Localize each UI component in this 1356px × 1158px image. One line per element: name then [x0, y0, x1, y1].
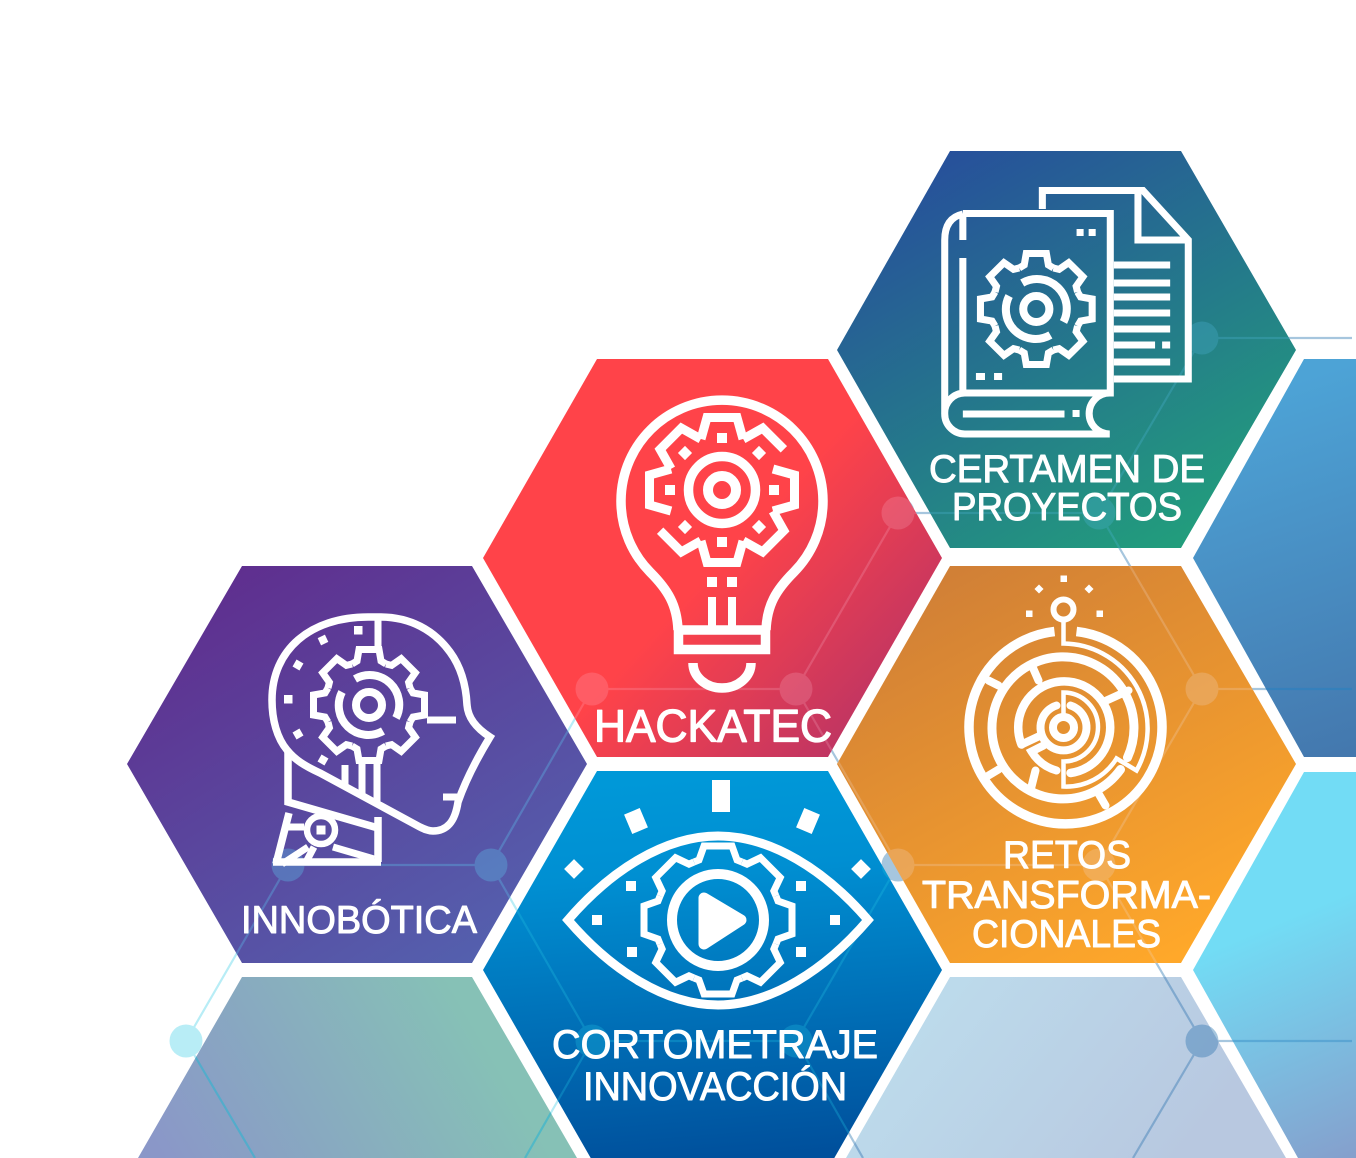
panel: hexagon shapes: [127, 151, 1356, 1158]
icon: eye with gear and play button: [564, 780, 871, 1005]
hexagon infographic: [127, 151, 1356, 1158]
panel: cortometraje innovaccion: [552, 780, 878, 1109]
icon: robot head with gear: [272, 617, 490, 864]
heading: retos transformacionales: CIONALES: [972, 913, 1161, 956]
icon: circular maze: [969, 576, 1162, 824]
heading: innobotica: INNOBÓTICA: [241, 899, 477, 942]
panel: certamen de proyectos: [929, 190, 1205, 529]
heading: retos transformacionales: TRANSFORMA-: [922, 874, 1211, 917]
panel: hackatec: [594, 400, 832, 752]
heading: certamen de proyectos: [929, 448, 1205, 529]
icon: light bulb with gear: [621, 400, 823, 688]
heading: hackatec: HACKATEC: [594, 700, 832, 752]
heading: cortometraje innovaccion: INNOVACCIÓN: [583, 1064, 847, 1109]
icon: book, document and gear: [945, 190, 1188, 434]
heading: certamen de proyectos: CERTAMEN DE: [929, 448, 1205, 491]
heading: cortometraje innovaccion: CORTOMETRAJE: [552, 1023, 878, 1067]
network overlay on hexagons: [170, 322, 1352, 1158]
panel: retos transformacionales: [922, 576, 1211, 956]
panel: innobotica: [241, 617, 490, 942]
network layer on white background: [170, 322, 1352, 1158]
heading: cortometraje innovaccion: [552, 1023, 878, 1109]
heading: certamen de proyectos: PROYECTOS: [952, 486, 1182, 529]
heading: retos transformacionales: [922, 834, 1211, 956]
heading: retos transformacionales: RETOS: [1003, 834, 1131, 877]
